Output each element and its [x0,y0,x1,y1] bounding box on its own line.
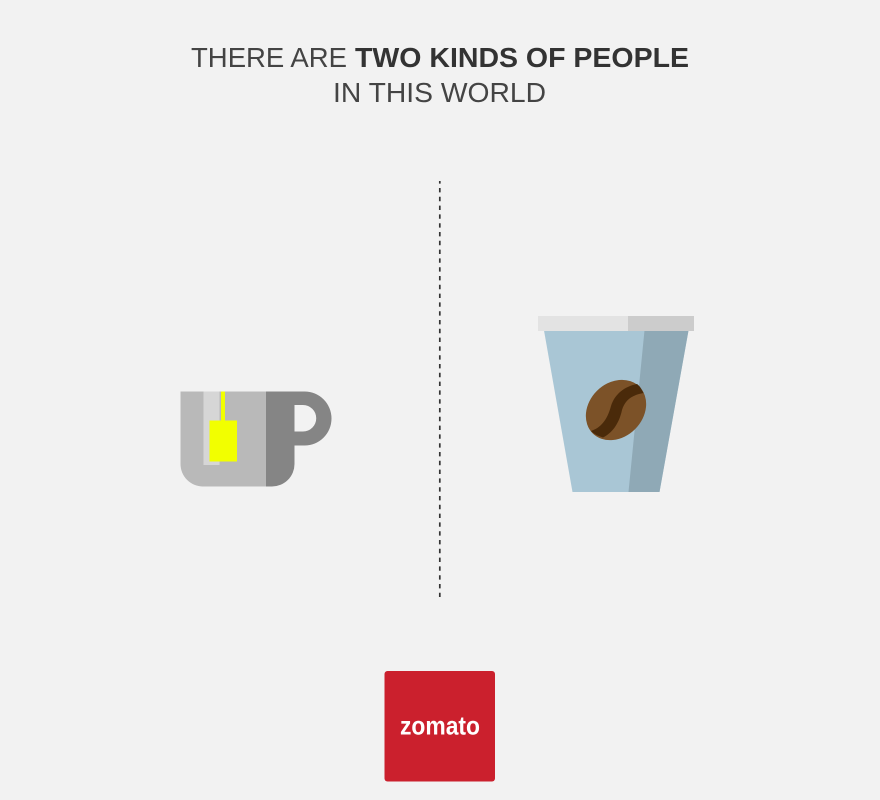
tea highlight strip [204,392,220,465]
logo background [384,671,495,782]
title: THERE ARE [191,42,347,73]
logo wordmark: zomato [400,710,480,740]
mug handle [266,392,332,446]
title [191,42,689,108]
bean crease [591,384,644,438]
cup lid light [538,316,628,331]
cup shadow [628,330,688,492]
title: TWO KINDS OF PEOPLE [355,42,689,73]
tea bag string [221,392,225,422]
cup lid dark [628,316,694,331]
mug body shadow [266,392,294,486]
bean shell [574,368,658,452]
title: IN THIS WORLD [333,77,546,108]
coffee bean [574,368,658,452]
cup body [544,330,688,492]
divider: dashed line [439,181,441,597]
tea bag tag [210,420,237,462]
mug body light [180,392,267,486]
icon: tea mug [180,392,332,486]
logo: zomato [384,671,495,782]
icon: coffee cup [538,316,694,492]
